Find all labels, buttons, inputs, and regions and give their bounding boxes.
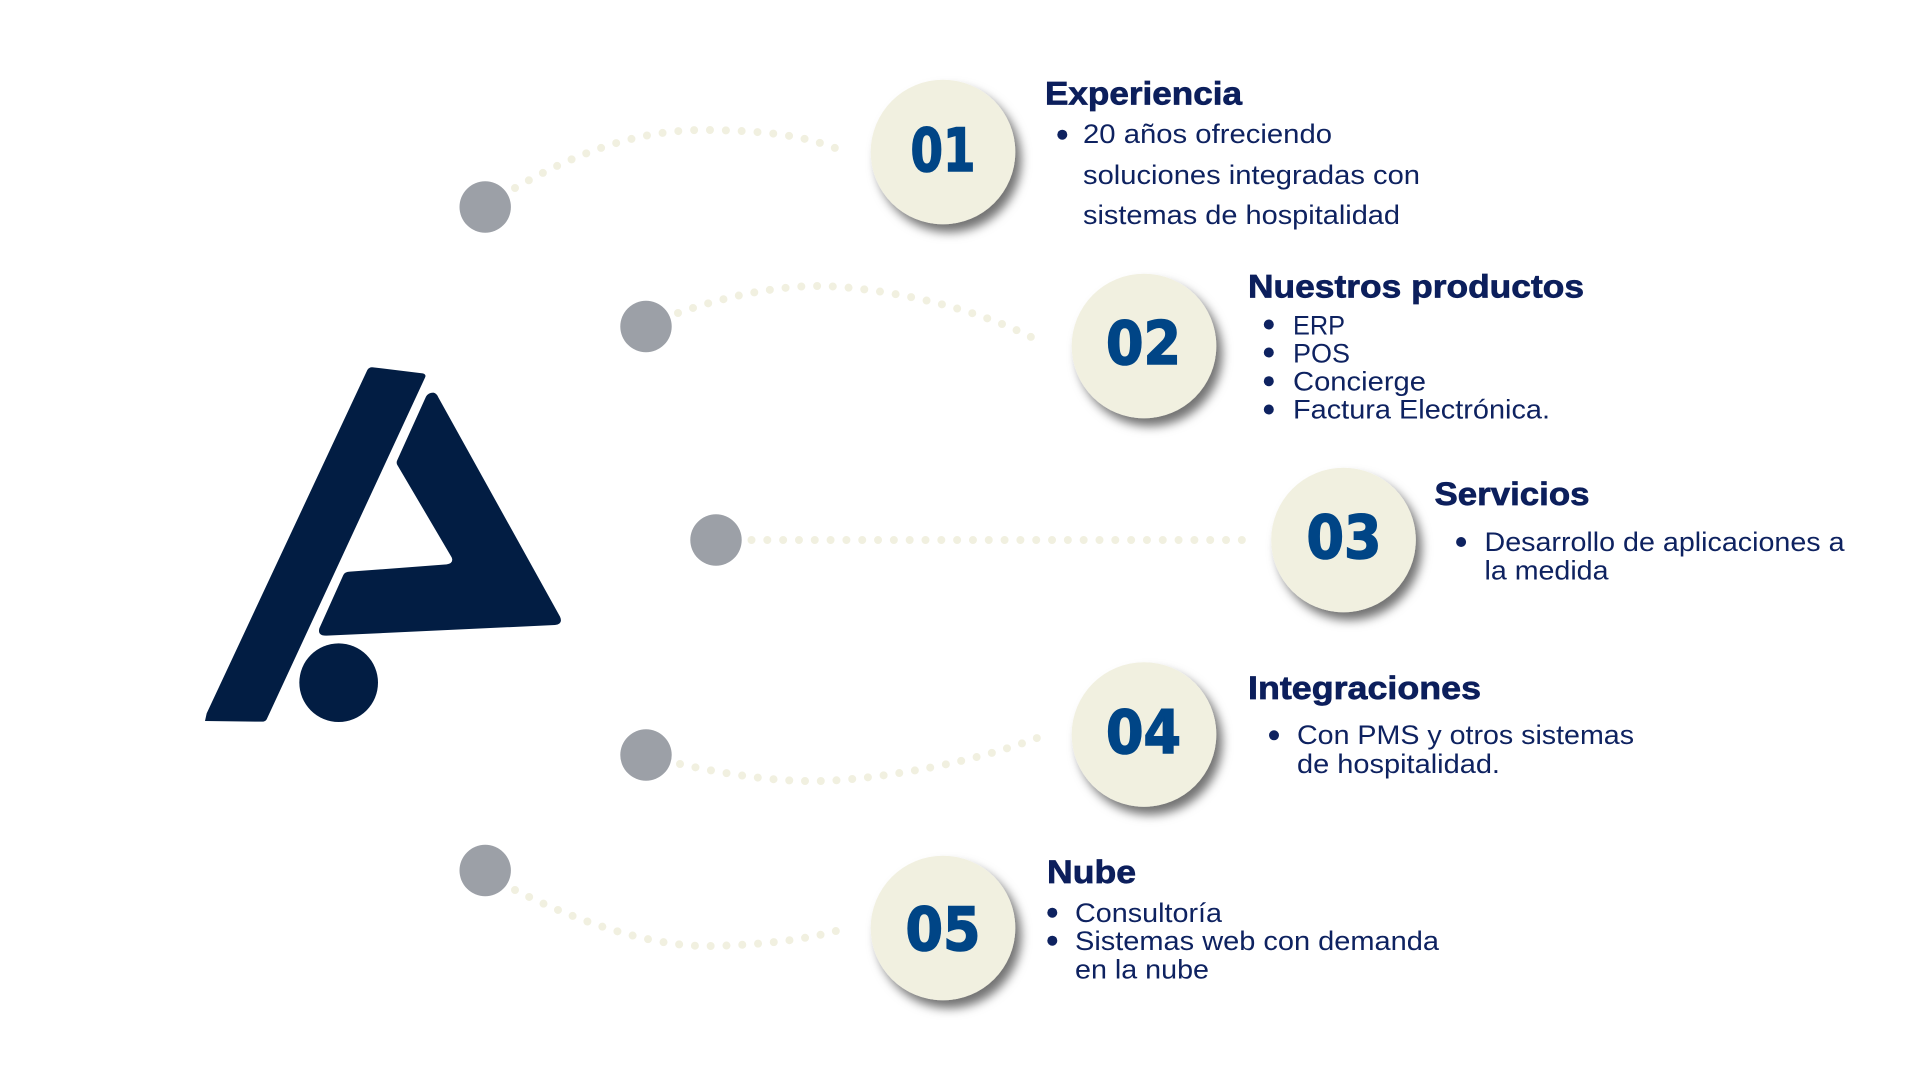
item 05: number badge: 05 — [906, 895, 980, 965]
item 04: number badge — [1072, 662, 1216, 807]
item 04: connector — [620, 729, 1037, 781]
item 01: text — [1045, 76, 1420, 230]
item 02: text: ERP — [1293, 310, 1345, 340]
item 03: text — [1434, 476, 1846, 586]
item 05: number badge — [871, 856, 1015, 1000]
item 05: text: Sistemas web con demanda — [1075, 926, 1440, 956]
item 03: number badge: 03 — [1306, 503, 1382, 573]
item 02: number badge — [1072, 274, 1216, 418]
item 03: connector — [690, 514, 1242, 566]
item 04: text: Integraciones — [1248, 670, 1481, 706]
item 02: text: Nuestros productos — [1248, 268, 1584, 304]
item 05: text: en la nube — [1075, 954, 1209, 984]
item 02: text: Factura Electrónica. — [1293, 394, 1550, 424]
item 04: text: de hospitalidad. — [1297, 749, 1500, 779]
item 04: text — [1248, 670, 1634, 779]
item 03: text: la medida — [1484, 556, 1610, 586]
logo — [205, 367, 561, 722]
item 04: number badge: 04 — [1106, 698, 1181, 768]
item 01: number badge: 01 — [910, 116, 976, 186]
item 02: number badge: 02 — [1106, 309, 1181, 379]
item 03: text: Servicios — [1434, 476, 1590, 512]
item 01: text: Experiencia — [1045, 76, 1242, 112]
item 02: text: POS — [1293, 338, 1350, 368]
item 02: connector — [620, 286, 1031, 352]
item 05: text: Consultoría — [1075, 898, 1223, 928]
item 03: text: Desarrollo de aplicaciones a — [1484, 527, 1846, 557]
item 02: text: Concierge — [1293, 366, 1426, 396]
item 05: text: Nube — [1047, 854, 1136, 890]
item 01: text: soluciones integradas con — [1083, 160, 1420, 190]
item 01: text: sistemas de hospitalidad — [1083, 200, 1400, 230]
item 04: text: Con PMS y otros sistemas — [1297, 720, 1634, 750]
item 01: connector — [460, 130, 835, 233]
item 03: number badge — [1271, 468, 1416, 612]
item 02: text — [1248, 268, 1584, 424]
item 01: number badge — [871, 80, 1015, 224]
item 05: text — [1047, 854, 1440, 984]
item 05: connector — [460, 845, 836, 946]
item 01: text: 20 años ofreciendo — [1083, 119, 1332, 149]
